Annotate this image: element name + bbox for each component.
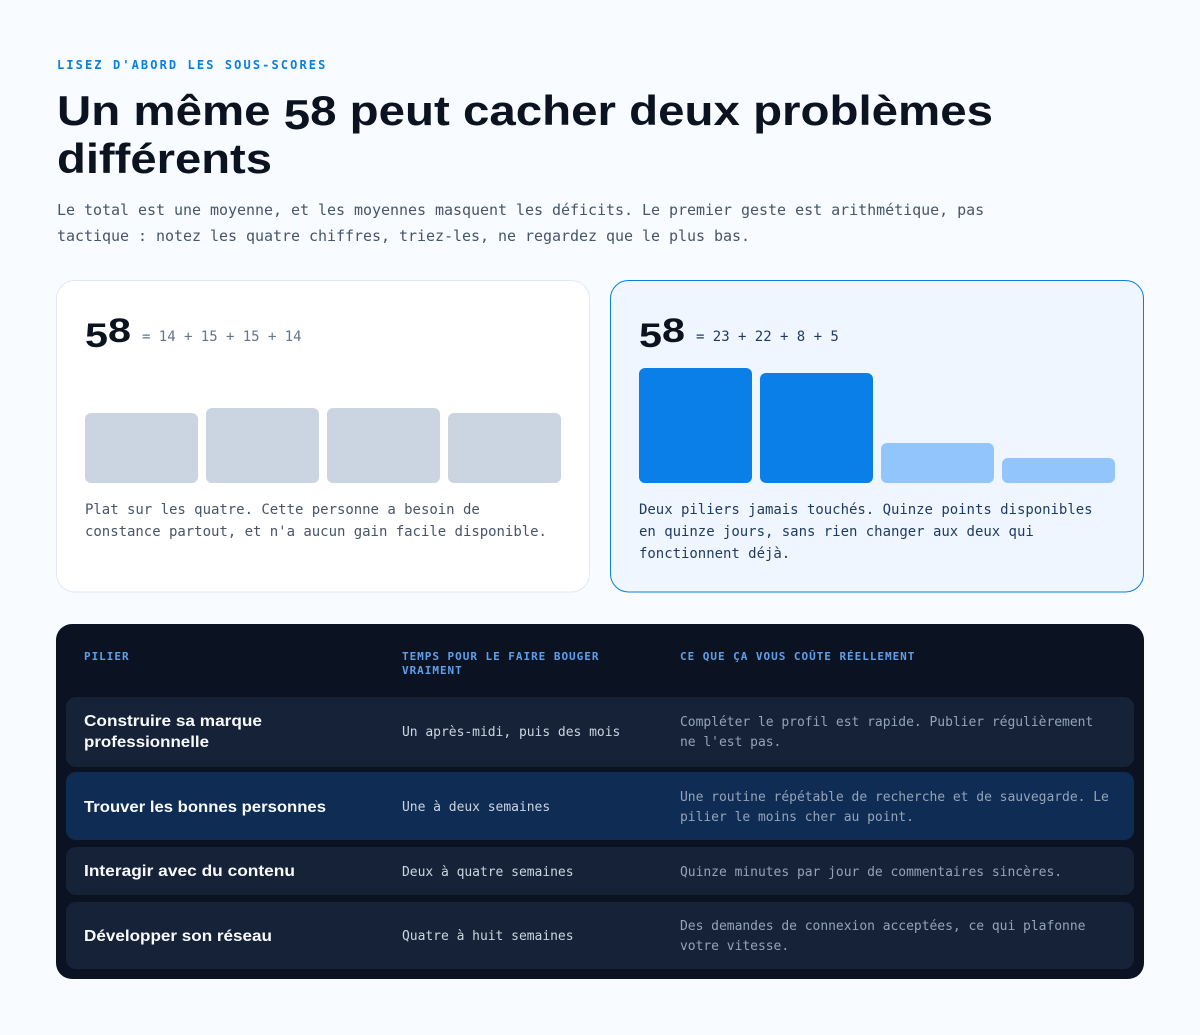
row: réseau: votre vitesse.	[680, 939, 789, 954]
row: marque: ne l'est pas.	[680, 735, 781, 750]
description uneven: fonctionnent déjà.	[639, 546, 790, 562]
panel: pillar table	[56, 624, 1144, 979]
intro text	[57, 201, 984, 245]
table header: PILIER	[84, 650, 130, 663]
row: réseau	[66, 902, 1134, 969]
description flat	[85, 502, 547, 540]
intro text: tactique : notez les quatre chiffres, triez-les, ne regardez que le plus bas.	[57, 227, 750, 245]
description uneven: Deux piliers jamais touchés. Quinze points disponibles	[639, 502, 1093, 518]
description uneven: en quinze jours, sans rien changer aux deux qui	[639, 524, 1034, 540]
bars flat	[85, 408, 561, 483]
title	[57, 87, 993, 182]
row: marque: Construire sa marque	[84, 713, 262, 730]
intro text: Le total est une moyenne, et les moyennes masquent les déficits. Le premier geste est arithmétique, pas	[57, 201, 984, 219]
row: contenu	[66, 847, 1134, 895]
table header: TEMPS POUR LE FAIRE BOUGER	[402, 650, 599, 663]
table header: VRAIMENT	[402, 664, 463, 677]
row: contenu: Interagir avec du contenu	[84, 863, 295, 880]
panel: uneven profile	[610, 280, 1144, 592]
row: personnes (highlighted): pilier le moins cher au point.	[680, 810, 914, 825]
sub-scores equation uneven: = 23 + 22 + 8 + 5	[696, 329, 839, 345]
row: marque	[66, 697, 1134, 767]
title: 5	[284, 91, 310, 138]
row: personnes (highlighted): Une routine répétable de recherche et de sauvegarde. Le	[680, 790, 1109, 805]
row: marque: Compléter le profil est rapide. Publier régulièrement	[680, 715, 1093, 730]
panel: flat profile	[56, 280, 590, 592]
row: réseau: Des demandes de connexion acceptées, ce qui plafonne	[680, 919, 1086, 934]
row: contenu: Deux à quatre semaines	[402, 865, 574, 880]
table header	[84, 650, 915, 677]
bars uneven	[639, 368, 1115, 483]
row: personnes (highlighted): Trouver les bonnes personnes	[84, 799, 326, 816]
score 58 uneven: 5	[639, 317, 662, 355]
table header: CE QUE ÇA VOUS COÛTE RÉELLEMENT	[680, 650, 915, 663]
title: différents	[57, 135, 272, 182]
row: réseau: Quatre à huit semaines	[402, 929, 574, 944]
score 58 uneven: 8	[662, 312, 685, 350]
row: personnes (highlighted)	[66, 772, 1134, 840]
title: peut cacher deux problèmes	[348, 87, 918, 134]
description uneven	[639, 502, 1093, 562]
row: personnes (highlighted): Une à deux semaines	[402, 800, 550, 815]
row: réseau: Développer son réseau	[84, 928, 272, 945]
score 58 flat: 8	[108, 312, 131, 350]
title: Un même	[57, 87, 246, 134]
title: 8	[310, 87, 337, 134]
eyebrow: LISEZ D'ABORD LES SOUS-SCORES	[57, 58, 327, 72]
row: marque: Un après-midi, puis des mois	[402, 725, 620, 740]
sub-scores equation flat: = 14 + 15 + 15 + 14	[142, 329, 302, 345]
description flat: Plat sur les quatre. Cette personne a besoin de	[85, 502, 480, 518]
description flat: constance partout, et n'a aucun gain facile disponible.	[85, 524, 547, 540]
row: marque: professionnelle	[84, 734, 209, 751]
score 58 flat: 5	[85, 317, 108, 355]
row: contenu: Quinze minutes par jour de commentaires sincères.	[680, 865, 1062, 880]
